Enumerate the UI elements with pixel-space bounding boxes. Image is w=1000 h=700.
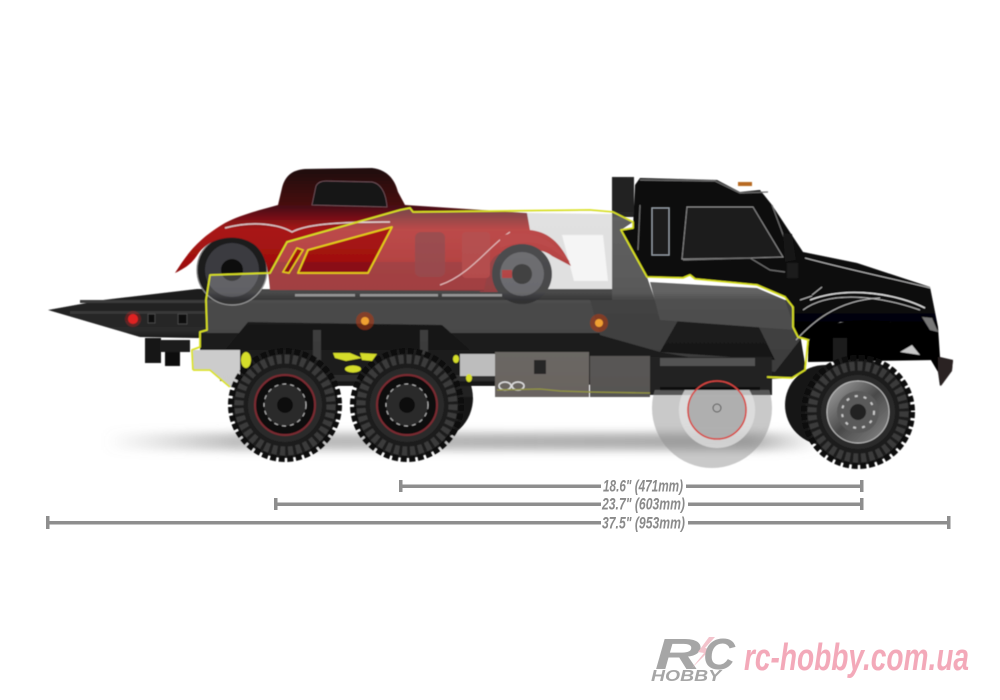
panel: front ghost arch: [590, 177, 800, 372]
yellow sliver outline: [283, 248, 303, 273]
dimension: 23.7 in: [274, 494, 864, 514]
flatbed deck: [48, 289, 660, 345]
watermark logo: RC Hobby: HOBBY: [651, 668, 723, 685]
hood highlights: [796, 258, 930, 340]
front spring: [833, 338, 847, 362]
yellow suspension parts: [241, 352, 472, 382]
watermark logo: RC Hobby: C: [703, 630, 736, 679]
car side window: [312, 181, 387, 207]
panel: ghost overlay region with window holes: [192, 208, 808, 397]
hitch: [145, 338, 190, 366]
ground shadow: [105, 433, 820, 450]
rear cab window: [652, 208, 669, 255]
front wheel: [804, 358, 912, 466]
rear tandem wheel right: [353, 351, 461, 459]
car front wheel: [492, 244, 552, 304]
deck slots under car: [295, 294, 502, 296]
main door window: [682, 207, 783, 259]
car body lower band: [270, 262, 490, 290]
rear tandem wheel left: [231, 351, 339, 459]
cab highlights: [638, 180, 785, 272]
ghost chassis box over middle wheel: [650, 357, 772, 395]
marker lights on roof: [738, 182, 752, 186]
dimension: wheelbase 18.6 in: 18.6" (471mm): [603, 476, 683, 496]
dimension: wheelbase 18.6 in: [399, 476, 864, 496]
car underside fill behind front wheel: [480, 252, 500, 292]
panel: ghost lower side boxes: [193, 350, 650, 397]
far side wheels: [387, 355, 865, 445]
car doors and side panels: [415, 232, 510, 285]
ghost bed side: [207, 303, 652, 334]
headlight: [922, 317, 938, 332]
dimension: overall length 37.5 in: [46, 514, 950, 532]
car front fender: [500, 233, 570, 262]
truck cab and hood: [612, 177, 953, 386]
bumper: [938, 357, 953, 386]
car rear wheel: [197, 235, 267, 305]
car white pinstripe: [225, 222, 390, 232]
bed side lights on deck: [125, 311, 141, 327]
lower chassis: [200, 322, 806, 386]
watermark logo: RC Hobby: R: [655, 630, 701, 679]
watermark logo: RC Hobby: [651, 630, 736, 685]
dimension: 23.7 in: 23.7" (603mm): [601, 494, 685, 514]
panel: ghost cab back behind car: [527, 213, 612, 300]
cab back column: [612, 177, 634, 212]
yellow window outline: [298, 227, 392, 273]
yellow ghost outline: [192, 208, 808, 387]
ghost middle wheel: [652, 379, 772, 468]
car on flatbed: [175, 168, 571, 305]
orange marker lights: [356, 312, 608, 332]
front wheel well: [808, 320, 935, 362]
dimension: overall length 37.5 in: 37.5" (953mm): [602, 514, 685, 532]
mirror: [783, 233, 798, 278]
infographic canvas: [46, 167, 968, 681]
car body: [175, 168, 571, 291]
